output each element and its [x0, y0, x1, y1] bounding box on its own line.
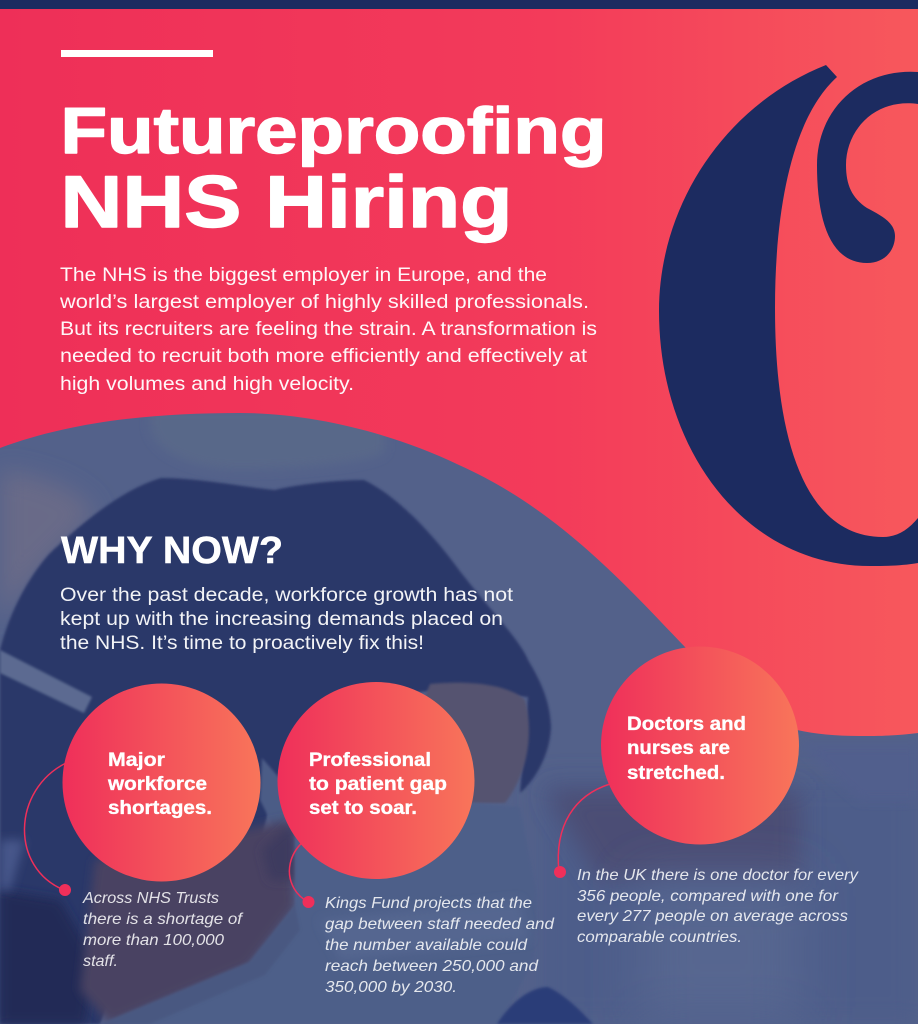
callout: major workforce shortages: shortages.: [108, 797, 212, 819]
title: Futureproofing: [60, 94, 606, 167]
callout: professional to patient gap: the number available could: [325, 937, 528, 954]
navy sleeve: [497, 987, 593, 1024]
callout: professional to patient gap: reach between 250,000 and: [325, 958, 539, 975]
why now paragraph: the NHS. It’s time to proactively fix this!: [60, 633, 424, 654]
callout: professional to patient gap: [278, 682, 555, 996]
callout: doctors and nurses stretched: every 277 people on average across: [577, 908, 848, 925]
callout: professional to patient gap: 350,000 by 2030.: [325, 979, 457, 996]
decorative title rule: [61, 50, 213, 57]
surgical cap shape: [0, 478, 551, 1024]
ear and neck skin: [425, 682, 530, 804]
title: NHS Hiring: [60, 162, 512, 243]
intro paragraph: The NHS is the biggest employer in Europe, and the: [60, 265, 547, 286]
callout: doctors and nurses stretched: nurses are: [627, 737, 730, 759]
callout: major workforce shortages: Across NHS Trusts: [82, 890, 219, 907]
surgical mask: [294, 836, 300, 907]
callout: major workforce shortages: [24, 684, 260, 970]
callout: major workforce shortages: there is a shortage of: [83, 911, 244, 928]
why now paragraph: [60, 585, 514, 654]
intro paragraph: world’s largest employer of highly skilled professionals.: [59, 292, 589, 313]
callout: major workforce shortages: Major: [108, 749, 165, 771]
callout: doctors and nurses stretched: comparable countries.: [577, 929, 742, 946]
callout: major workforce shortages: workforce: [107, 773, 207, 795]
callout: professional to patient gap: gap between staff needed and: [325, 916, 555, 933]
icon: large navy quotation logo shape: [659, 65, 918, 566]
callout: professional to patient gap: Professional: [309, 749, 431, 771]
intro paragraph: [59, 265, 597, 395]
title: [60, 94, 606, 243]
callout: doctors and nurses stretched: stretched.: [627, 762, 725, 784]
callout: doctors and nurses stretched: 356 people, compared with one for: [577, 888, 839, 905]
why now paragraph: Over the past decade, workforce growth has not: [60, 585, 514, 606]
heading: why now: WHY NOW?: [61, 530, 283, 572]
red background shape: [0, 0, 918, 736]
neck skin: [80, 820, 295, 1024]
why now paragraph: kept up with the increasing demands placed on: [60, 609, 503, 630]
dark hair: [0, 890, 95, 1024]
top navy band: [0, 0, 918, 9]
intro paragraph: high volumes and high velocity.: [60, 374, 354, 395]
callout: major workforce shortages: more than 100,000: [83, 932, 224, 949]
intro paragraph: But its recruiters are feeling the strain. A transformation is: [60, 319, 597, 340]
callout: doctors and nurses stretched: In the UK there is one doctor for every: [577, 867, 859, 884]
photo background: surgeon in cap and mask: [0, 400, 918, 1024]
callout: professional to patient gap: set to soar.: [309, 797, 417, 819]
callout: professional to patient gap: to patient gap: [309, 773, 447, 795]
callout: professional to patient gap: Kings Fund projects that the: [325, 895, 532, 912]
mask ear loop strap: [0, 650, 92, 713]
callout: doctors and nurses stretched: [554, 646, 859, 946]
callout: major workforce shortages: staff.: [83, 953, 118, 970]
callout: doctors and nurses stretched: Doctors and: [627, 713, 746, 735]
intro paragraph: needed to recruit both more efficiently and effectively at: [60, 346, 588, 367]
